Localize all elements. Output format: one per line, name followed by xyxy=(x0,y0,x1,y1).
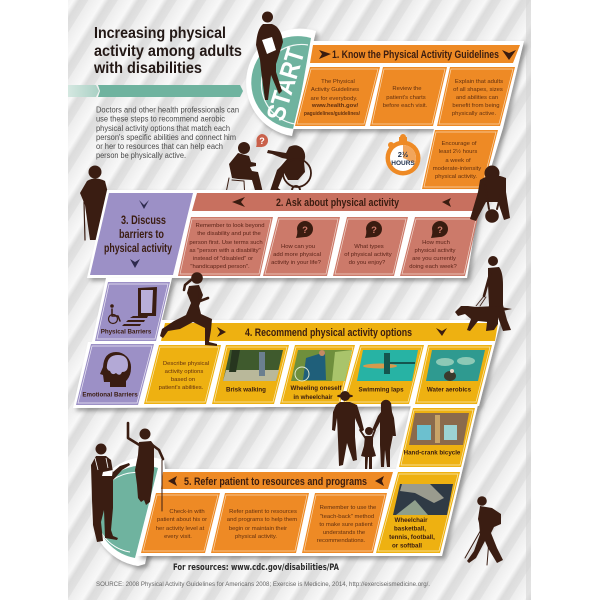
ask card 3: do you enjoy? xyxy=(349,260,386,266)
ask card 3 xyxy=(333,217,408,276)
options card: swimming xyxy=(343,345,424,404)
options card: wheeling: in wheelchair xyxy=(293,394,333,401)
emotional barriers card: Emotional Barriers xyxy=(82,392,138,398)
ask card 1: "handicapped person". xyxy=(190,264,250,270)
title: activity among adults xyxy=(94,43,242,60)
ask card 2 xyxy=(263,217,340,276)
step 3 discuss barriers: physical activity xyxy=(104,243,172,255)
guideline card 3: and abilities can xyxy=(456,95,498,101)
referral card 1: her activity level at xyxy=(156,526,205,532)
ask card 4: doing each week? xyxy=(409,264,457,270)
guideline card 4: physical activity. xyxy=(435,174,477,180)
mother xyxy=(372,400,396,467)
title xyxy=(93,25,242,77)
ask card 1: instead of "disabled" or xyxy=(193,256,253,262)
options card: water aerobics: Water aerobics xyxy=(427,386,472,394)
silhouette: man with guide dog xyxy=(455,256,512,331)
intro paragraph: use these steps to recommend aerobic xyxy=(96,114,225,124)
referral card 1: patient about his or xyxy=(157,517,207,523)
referral card 2: physical activity. xyxy=(235,534,277,540)
intro paragraph: person be physically active. xyxy=(96,151,186,160)
silhouette: seated person xyxy=(225,142,267,200)
intro paragraph: person's specific abilities and connect him xyxy=(96,133,236,142)
panel: step 4 options background xyxy=(73,278,501,408)
guideline card 2 xyxy=(370,67,447,126)
referral card 2: and programs to help them xyxy=(227,517,297,523)
start badge: START xyxy=(260,45,311,124)
guideline card 4: a week of xyxy=(445,158,471,164)
options card: wheelchair sports xyxy=(376,472,460,553)
referral card 2 xyxy=(211,493,309,553)
guideline card 1: Activity Guidelines xyxy=(311,87,359,93)
source note: SOURCE: 2008 Physical Activity Guidelines for Americans 2008; Exercise is Medicine, 2014, http://exerciseismedicine.org/. xyxy=(96,582,430,588)
guideline card 4: least 2½ hours xyxy=(439,148,477,155)
panel: step 1 guidelines xyxy=(293,41,524,191)
guideline card 4: Encourage of xyxy=(441,141,477,147)
intro paragraph: physical activity options that match each xyxy=(96,124,230,133)
options card: wheeling: Wheeling oneself xyxy=(291,385,342,392)
step 2 heading bar xyxy=(192,193,478,211)
icon: question bubble: ? xyxy=(259,136,265,146)
ask card 4: are you currently xyxy=(412,256,456,262)
silhouette: doctor with clipboard xyxy=(256,12,283,100)
guideline card 1: www.health.gov/ xyxy=(311,103,358,109)
silhouette: hiker with poles xyxy=(465,496,503,565)
icon: stopwatch 2.5 hours: HOURS xyxy=(391,160,415,167)
ask card 1: person first. Use terms such xyxy=(189,240,263,246)
panel: step 5 referral xyxy=(91,405,478,566)
options card: wheeling xyxy=(280,345,355,404)
step 4 heading bar: 4. Recommend physical activity options xyxy=(245,327,412,339)
panel: step 2 and 3 background xyxy=(87,190,481,278)
options card: hand-crank bicycle xyxy=(399,408,475,467)
ask card 4: How much xyxy=(422,240,450,246)
step 1 heading bar xyxy=(310,45,520,63)
guideline card 1: are for everybody. xyxy=(310,96,358,102)
guideline card 3: physically active. xyxy=(452,111,496,117)
guideline card 4: moderate-intensity xyxy=(433,166,481,172)
title: with disabilities xyxy=(93,60,202,77)
ask card 1 xyxy=(178,217,273,276)
ask card 1: the disability and put the xyxy=(197,231,261,237)
referral card 3: "teach-back" method xyxy=(320,514,374,520)
referral card 3: Remember to use the xyxy=(320,505,377,511)
options card: wheelchair sports: tennis, football, xyxy=(389,534,435,541)
emotional barriers card xyxy=(76,344,154,405)
options card: brisk walking xyxy=(212,345,289,404)
intro paragraph: or her to resources that can help each xyxy=(96,142,223,151)
title: Increasing physical xyxy=(94,25,226,42)
ask card 3: of physical activity xyxy=(344,252,392,258)
guideline card 3: benefit from being xyxy=(452,103,500,109)
ask card 3: What types xyxy=(354,244,384,250)
icon: question bubble xyxy=(256,134,268,147)
referral card 3: recommendations. xyxy=(317,538,366,544)
guideline card 2: patient's charts xyxy=(386,95,426,101)
intro paragraph xyxy=(96,106,239,160)
icon: stopwatch 2.5 hours xyxy=(386,134,420,176)
guideline card 3: Explain that adults xyxy=(455,79,503,85)
options card: describe: activity options xyxy=(165,369,203,375)
options card: wheelchair sports: Wheelchair xyxy=(394,517,428,524)
step 1 heading bar: 1. Know the Physical Activity Guidelines xyxy=(332,49,499,61)
options card: describe: patient's abilities. xyxy=(159,385,204,391)
options card: swimming: Swimming laps xyxy=(358,386,404,394)
physical barriers card: Physical Barriers xyxy=(101,328,152,336)
green divider bar xyxy=(68,85,243,97)
icon: stopwatch 2.5 hours: 2½ xyxy=(398,150,408,159)
silhouette: older adult with canes xyxy=(80,166,112,240)
referral curve badge xyxy=(91,457,165,566)
guideline card 1: The Physical xyxy=(321,79,355,85)
guideline card 1: paguidelines/guidelines/ xyxy=(304,111,360,117)
resources link: For resources: www.cdc.gov/disabilities/PA xyxy=(173,563,339,573)
child xyxy=(360,427,376,471)
step 3 discuss barriers: barriers to xyxy=(119,229,164,241)
ask card 4 xyxy=(400,217,478,276)
referral card 3: to make sure patient xyxy=(319,522,373,528)
ask card 1: as "person with a disability" xyxy=(189,248,261,254)
step 5 heading bar: 5. Refer patient to resources and programs xyxy=(184,476,367,488)
ask card 2: activity in your life? xyxy=(271,260,322,266)
referral card 2: Refer patient to resources xyxy=(229,509,297,515)
start badge xyxy=(246,29,316,136)
options card: hand-crank bicycle: Hand-crank bicycle xyxy=(404,450,461,456)
options card: water aerobics xyxy=(415,345,492,404)
referral card 1 xyxy=(141,493,220,553)
guideline card 3 xyxy=(437,67,515,126)
striped page background xyxy=(68,0,531,600)
ask card 1: Remember to look beyond xyxy=(195,223,265,229)
father with hat xyxy=(332,391,364,466)
guideline card 3: of all shapes, sizes xyxy=(453,87,503,93)
ask card 2: add more physical xyxy=(273,252,321,258)
step 2 heading bar: 2. Ask about physical activity xyxy=(276,197,400,209)
silhouette: person bending with ball xyxy=(470,166,510,223)
step 4 heading bar xyxy=(161,323,498,341)
guideline card 1 xyxy=(295,67,380,126)
options card: describe: based on xyxy=(171,377,195,383)
ask card 4: ? xyxy=(437,225,443,236)
silhouette: doctor talking xyxy=(91,444,130,542)
referral card 1: every visit. xyxy=(164,534,192,540)
guideline card 2: Review the xyxy=(392,86,422,92)
guideline card 2: before each visit. xyxy=(383,103,428,109)
guideline card 4 xyxy=(422,130,498,189)
ask card 3: ? xyxy=(371,225,377,236)
options card: wheelchair sports: or softball xyxy=(392,542,422,550)
silhouette: runner xyxy=(160,272,217,346)
step 5 heading bar xyxy=(161,472,393,489)
step 3 discuss barriers xyxy=(90,193,193,275)
options card: describe xyxy=(144,345,221,404)
ask card 2: ? xyxy=(302,225,308,236)
ask card 2: How can you xyxy=(281,244,315,250)
silhouette: family holding hands xyxy=(332,391,396,471)
ask card 4: physical activity xyxy=(415,248,456,254)
referral card 1: Check-in with xyxy=(169,509,205,515)
intro paragraph: Doctors and other health professionals can xyxy=(96,106,239,114)
silhouette: person in wheelchair xyxy=(267,145,311,194)
referral card 3: understands the xyxy=(323,530,366,536)
referral card 3 xyxy=(302,493,387,553)
options card: wheelchair sports: basketball, xyxy=(394,526,426,532)
referral card 2: begin or maintain their xyxy=(229,526,287,532)
options card: brisk walking: Brisk walking xyxy=(226,386,266,394)
silhouette: person with raised arm and cane xyxy=(128,423,163,511)
options card: describe: Describe physical xyxy=(163,361,209,367)
step 3 discuss barriers: 3. Discuss xyxy=(121,215,166,227)
physical barriers card xyxy=(95,282,170,341)
